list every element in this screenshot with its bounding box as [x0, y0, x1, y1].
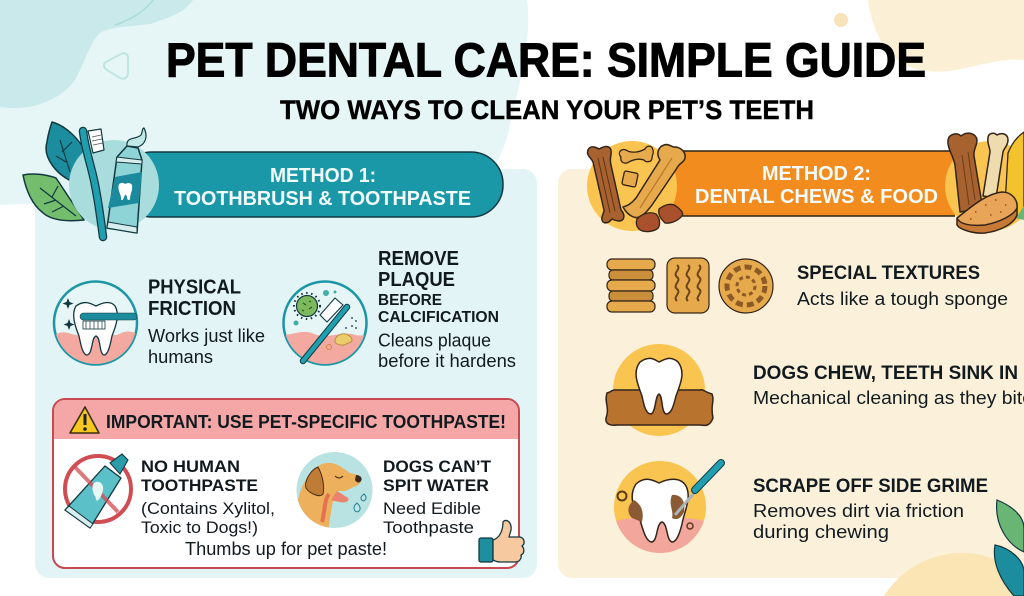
dogs chew text: Mechanical cleaning as they bite: [753, 388, 1024, 408]
panel: method 1: [23, 122, 1024, 596]
icon: toothbrush, toothpaste and leaves: [23, 122, 159, 237]
panel: method 2: [558, 132, 1024, 596]
title: PET DENTAL CARE: SIMPLE GUIDE: [166, 34, 926, 88]
icon: thumbs up: [479, 520, 524, 562]
icon: physical friction: [54, 282, 137, 370]
no human toothpaste text: Toxic to Dogs!): [141, 518, 258, 537]
method 1 banner: [120, 152, 503, 217]
physical friction text: humans: [148, 347, 213, 367]
remove plaque text: REMOVE: [378, 248, 459, 270]
icon: dog: [296, 452, 372, 532]
scrape off side grime text: during chewing: [753, 522, 889, 542]
physical friction text: FRICTION: [148, 298, 236, 320]
warning header: [54, 400, 518, 439]
physical friction text: [148, 276, 265, 367]
dogs can't spit water text: Need Edible: [383, 499, 481, 518]
dogs can't spit water text: Toothpaste: [383, 518, 474, 537]
dogs can't spit water text: SPIT WATER: [383, 476, 489, 495]
thumbs up caption: Thumbs up for pet paste!: [185, 539, 387, 559]
special textures text: Acts like a tough sponge: [797, 289, 1008, 309]
icon: no human toothpaste: [65, 454, 131, 528]
special textures text: SPECIAL TEXTURES: [797, 263, 980, 284]
subtitle: TWO WAYS TO CLEAN YOUR PET’S TEETH: [280, 95, 814, 125]
decorative corner blob and leaves: [884, 500, 1024, 596]
dogs chew text: DOGS CHEW, TEETH SINK IN: [753, 363, 1018, 384]
physical friction text: PHYSICAL: [148, 276, 241, 298]
no human toothpaste text: TOOTHPASTE: [141, 476, 258, 495]
warning header: IMPORTANT: USE PET-SPECIFIC TOOTHPASTE!: [106, 412, 506, 432]
scrape off side grime text: [753, 476, 988, 542]
dogs can't spit water text: DOGS CAN’T: [383, 457, 492, 476]
method 1 banner: METHOD 1:: [270, 165, 376, 187]
dogs can't spit water text: [383, 457, 492, 537]
remove plaque text: PLAQUE: [378, 269, 455, 291]
background blobs: [0, 0, 1024, 205]
remove plaque text: CALCIFICATION: [378, 309, 499, 326]
scrape off side grime text: Removes dirt via friction: [753, 501, 964, 521]
no human toothpaste text: NO HUMAN: [141, 457, 240, 476]
special textures text: [797, 263, 1008, 309]
no human toothpaste text: [141, 457, 275, 537]
remove plaque text: before it hardens: [378, 351, 516, 371]
icon: scraping grime: [612, 461, 721, 560]
warning box: [53, 399, 524, 568]
method 1 banner: TOOTHBRUSH & TOOTHPASTE: [174, 188, 471, 210]
scrape off side grime text: SCRAPE OFF SIDE GRIME: [753, 476, 988, 497]
method 2 banner: DENTAL CHEWS & FOOD: [695, 186, 938, 208]
remove plaque text: BEFORE: [378, 292, 442, 309]
icon: bones and treats left: [587, 141, 685, 232]
remove plaque text: Cleans plaque: [378, 330, 491, 350]
remove plaque text: [378, 248, 516, 371]
physical friction text: Works just like: [148, 326, 265, 346]
icon: special textures: [607, 258, 773, 313]
method 2 banner: METHOD 2:: [762, 163, 871, 185]
no human toothpaste text: (Contains Xylitol,: [141, 499, 275, 518]
method 2 banner: [665, 151, 955, 216]
icon: remove plaque: [284, 282, 368, 370]
icon: bones and biscuit right: [945, 132, 1024, 233]
icon: tooth biting chew: [606, 344, 713, 436]
dogs chew text: [753, 363, 1024, 408]
